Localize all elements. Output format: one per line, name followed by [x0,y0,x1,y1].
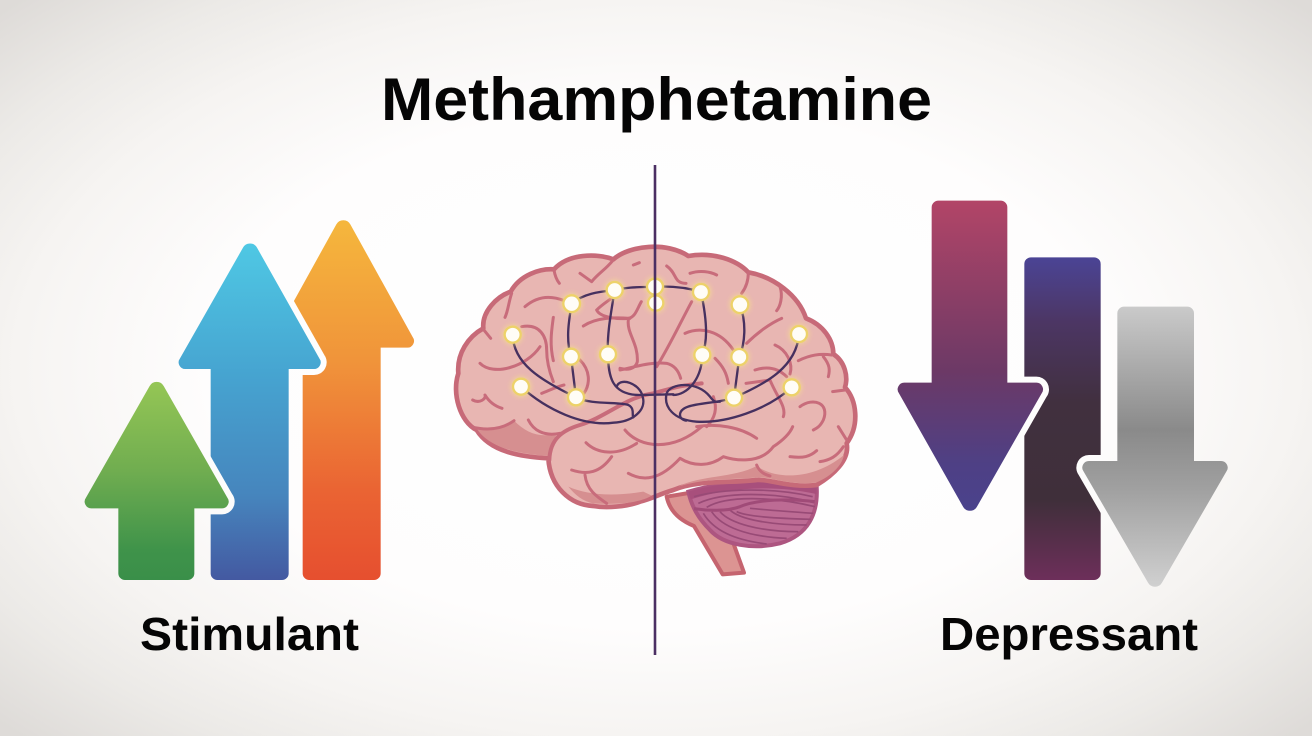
neural wiring [513,287,799,423]
title: Methamphetamine [381,66,932,133]
cerebrum outline [456,247,855,507]
shaded underside [471,421,844,504]
icon: dark bar [1024,257,1101,580]
central divider line [654,165,656,655]
stimulant arrows [85,220,414,580]
glowing neuron nodes [502,276,809,408]
icon: grey down arrow [1082,307,1228,587]
label: depressant: Depressant [940,608,1198,660]
cortical folds [471,261,847,503]
cerebellum [688,481,817,546]
icon: orange up arrow [294,220,414,580]
depressant arrows [898,201,1228,587]
brain illustration [456,247,855,574]
label: stimulant: Stimulant [140,608,359,660]
icon: blue up arrow [179,244,321,580]
brainstem [667,490,744,574]
icon: green up arrow [85,382,229,580]
icon: crimson down arrow [898,201,1043,511]
